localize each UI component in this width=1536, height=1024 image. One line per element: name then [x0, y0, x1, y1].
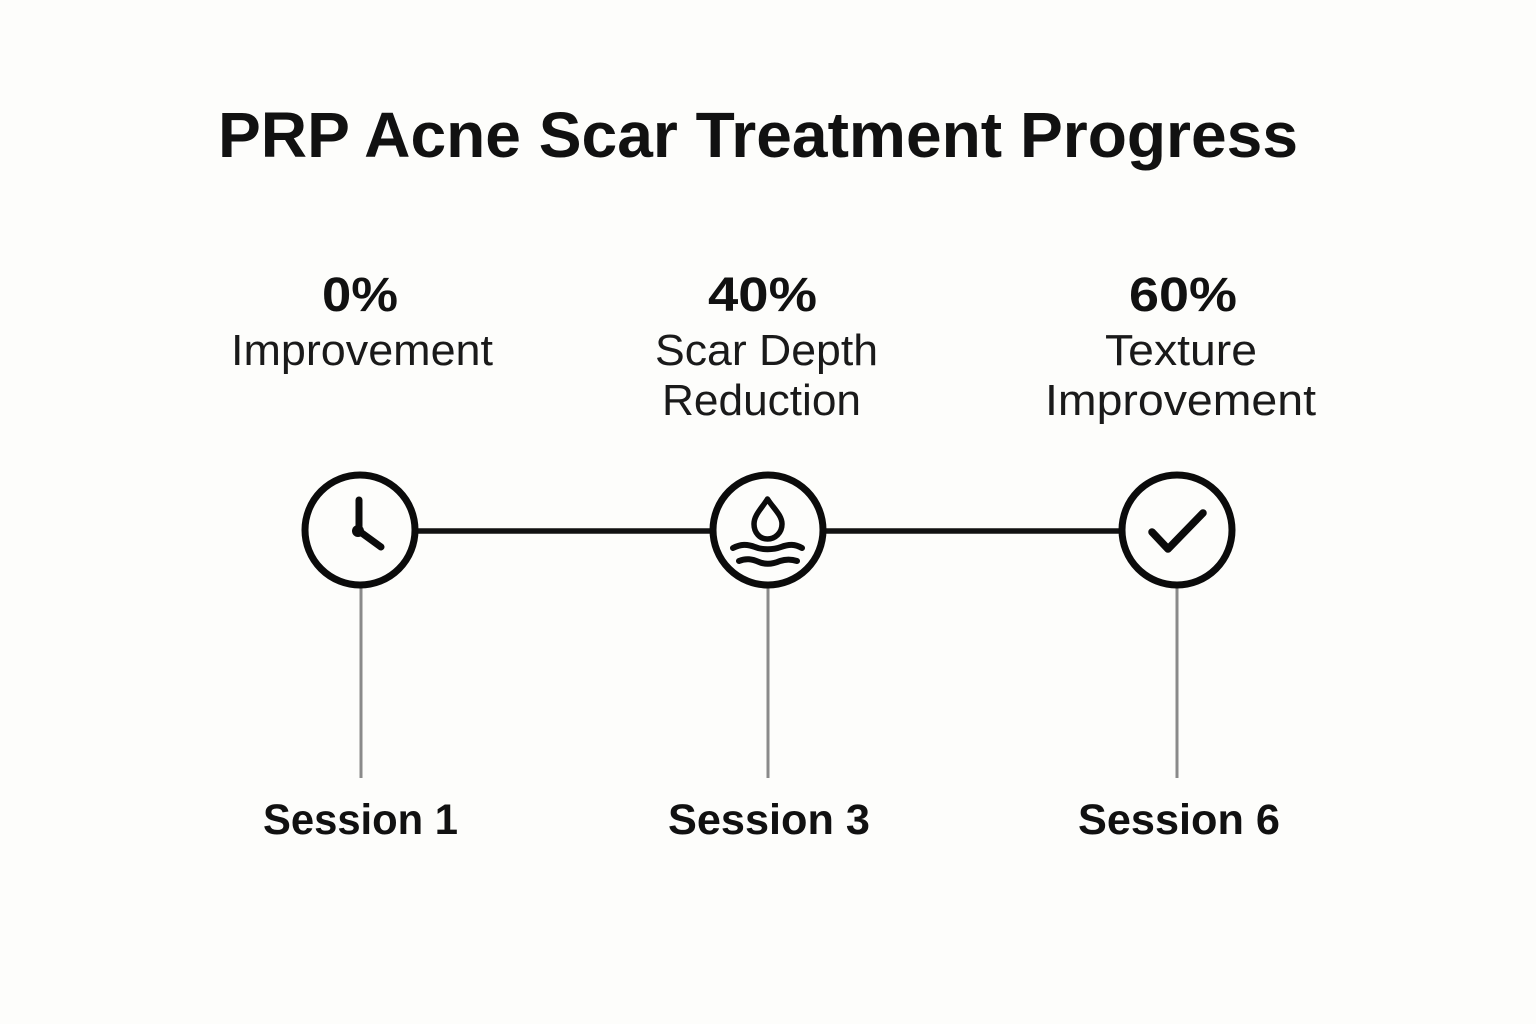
stat: 0% improvement: 0%: [322, 269, 398, 322]
label: session 3: Session 3: [668, 796, 870, 844]
stem: session 6: [1176, 586, 1178, 778]
stat: 60% texture improvement: [1045, 269, 1316, 425]
stat: 40% scar depth reduction: Scar Depth: [655, 326, 878, 375]
stat: 60% texture improvement: 60%: [1129, 269, 1237, 322]
stat: 60% texture improvement: Texture: [1105, 326, 1257, 375]
connector line between milestones: [415, 528, 1122, 534]
stem: session 3: [766, 586, 770, 778]
stat: 40% scar depth reduction: [655, 269, 878, 425]
milestone: session 1: [231, 269, 493, 844]
icon: water drop and waves: [713, 475, 823, 585]
milestone: session 6: [1045, 269, 1316, 844]
stat: 40% scar depth reduction: 40%: [708, 269, 817, 322]
title: PRP Acne Scar Treatment Progress: [218, 99, 1298, 171]
stat: 0% improvement: Improvement: [231, 326, 493, 375]
icon: clock: [305, 475, 415, 585]
stat: 0% improvement: [231, 269, 493, 375]
label: session 6: Session 6: [1078, 796, 1280, 844]
label: session 1: Session 1: [263, 796, 458, 844]
milestone: session 3: [655, 269, 878, 844]
stat: 40% scar depth reduction: Reduction: [662, 376, 861, 425]
stat: 60% texture improvement: Improvement: [1045, 376, 1316, 425]
stem: session 1: [360, 586, 362, 778]
icon: check mark: [1122, 475, 1232, 585]
